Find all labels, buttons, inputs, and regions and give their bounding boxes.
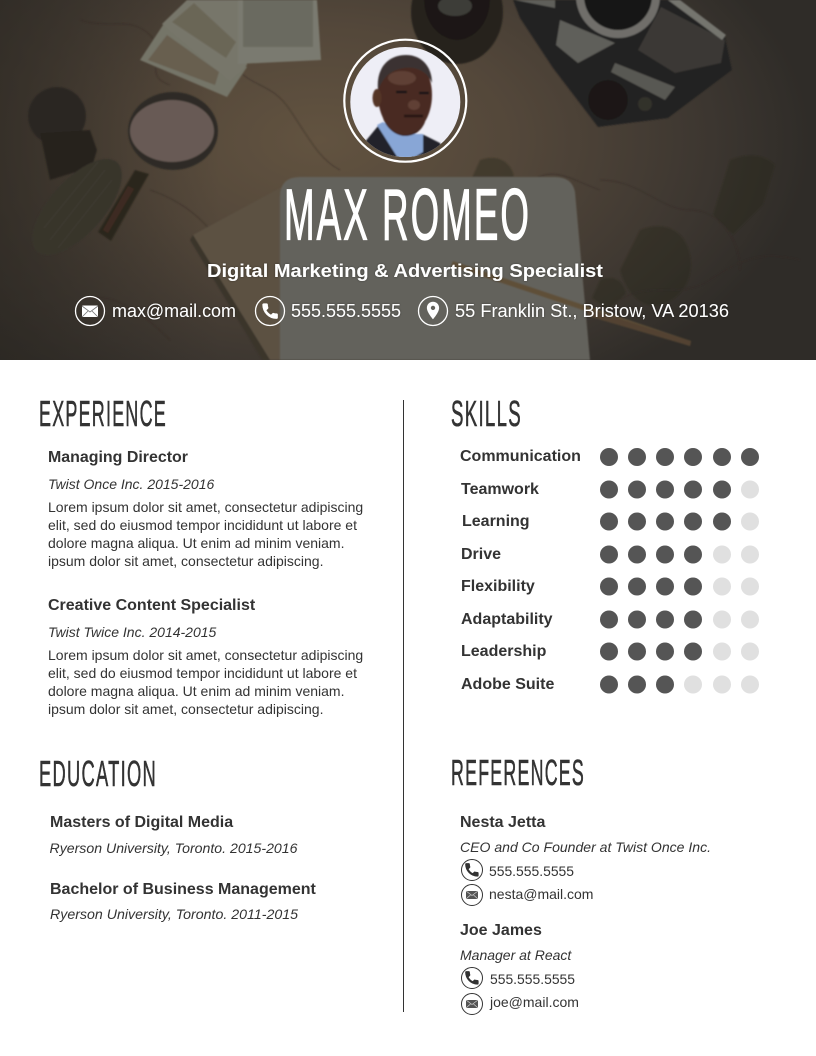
skill: drive (461, 546, 759, 564)
postcards (140, 25, 247, 97)
skill: adobe suite: Adobe Suite (461, 676, 554, 693)
job: managing director: elit, sed do eiusmod tempor incididunt ut labore et (48, 517, 357, 533)
reference: nesta jetta: Nesta Jetta (460, 814, 545, 831)
degree: bachelor: Bachelor of Business Management (50, 881, 317, 898)
job: creative content specialist (48, 597, 363, 717)
skill: adobe suite (461, 676, 759, 694)
skill: communication (460, 448, 759, 466)
job: creative content specialist: ipsum dolor sit amet, consectetur adipiscing. (48, 701, 323, 717)
skill: teamwork: Teamwork (461, 481, 539, 498)
job: managing director: Lorem ipsum dolor sit amet, consectetur adipiscing (48, 499, 363, 515)
job: managing director: dolore magna aliqua. Ut enim ad minim veniam. (48, 535, 344, 551)
skill: drive: Drive (461, 546, 501, 563)
reference: nesta jetta (460, 814, 711, 906)
notebook right page (280, 177, 590, 360)
job: managing director: ipsum dolor sit amet, consectetur adipiscing. (48, 553, 323, 569)
degree: masters: Ryerson University, Toronto. 2015-2016 (50, 840, 298, 856)
job: creative content specialist: elit, sed do eiusmod tempor incididunt ut labore et (48, 665, 357, 681)
icon: mail (76, 296, 104, 326)
icon: location pin (418, 296, 448, 326)
panel: experience: EXPERIENCE (39, 393, 167, 434)
skill: leadership (461, 642, 759, 660)
address: 55 Franklin St., Bristow, VA 20136 (455, 301, 729, 321)
portrait (350, 46, 461, 158)
reference: joe james: Joe James (460, 922, 542, 939)
name: MAX ROMEO (284, 176, 531, 256)
job: managing director (48, 449, 363, 569)
degree: bachelor: Ryerson University, Toronto. 2011-2015 (50, 906, 298, 922)
pencil (451, 261, 674, 336)
heading: education: EDUCATION (39, 753, 157, 794)
job: creative content specialist: Lorem ipsum dolor sit amet, consectetur adipiscing (48, 647, 363, 663)
icon: phone (256, 296, 284, 326)
job: managing director: Managing Director (48, 449, 188, 466)
reference: joe james: 555.555.5555 (490, 971, 575, 987)
phone number: 555.555.5555 (291, 301, 401, 321)
camera body (513, 0, 732, 127)
twine ball (72, 159, 122, 228)
job title: Digital Marketing & Advertising Specialist (207, 261, 603, 281)
panel: education (39, 753, 317, 922)
profile photo (344, 40, 466, 162)
job: creative content specialist: Twist Twice Inc. 2014-2015 (48, 624, 217, 640)
camera grip (638, 7, 725, 73)
spool (28, 87, 86, 145)
skill: flexibility (461, 578, 759, 596)
skill: communication: Communication (460, 448, 581, 465)
reference: joe james: joe@mail.com (489, 994, 579, 1010)
degree: masters (50, 814, 298, 856)
panel: experience (39, 393, 363, 717)
panel: references (451, 752, 711, 1014)
header background photo: map, camera, magnifier and notebook (0, 0, 816, 360)
degree: masters: Masters of Digital Media (50, 814, 233, 831)
email: max@mail.com (112, 301, 236, 321)
job: creative content specialist: dolore magna aliqua. Ut enim ad minim veniam. (48, 683, 344, 699)
panel: skills (451, 393, 759, 694)
camera lens mount (576, 0, 660, 38)
reference: nesta jetta: nesta@mail.com (489, 886, 593, 902)
skill: adaptability (461, 610, 759, 628)
magnifier (98, 170, 149, 241)
header contact row (76, 296, 729, 326)
reference: nesta jetta: CEO and Co Founder at Twist Once Inc. (460, 839, 711, 855)
heading: skills: SKILLS (451, 393, 522, 434)
skill: leadership: Leadership (461, 643, 547, 660)
map detail (152, 70, 619, 226)
notebook left page (194, 216, 280, 360)
job: managing director: Twist Once Inc. 2015-2016 (48, 476, 214, 492)
outer ring (344, 40, 466, 162)
skill: learning (462, 512, 759, 530)
panel: references: REFERENCES (451, 752, 585, 793)
reference: joe james: Manager at React (460, 947, 572, 963)
degree: bachelor (50, 881, 317, 922)
lens at top (411, 0, 503, 64)
reference: joe james (460, 922, 579, 1014)
job: creative content specialist: Creative Content Specialist (48, 597, 256, 614)
camera top plate (556, 20, 615, 63)
column divider (403, 400, 404, 1012)
reference: nesta jetta: 555.555.5555 (489, 863, 574, 879)
skill: learning: Learning (462, 513, 530, 530)
skill: flexibility: Flexibility (461, 578, 535, 595)
skill: teamwork (461, 480, 759, 498)
skill: adaptability: Adaptability (461, 611, 553, 628)
